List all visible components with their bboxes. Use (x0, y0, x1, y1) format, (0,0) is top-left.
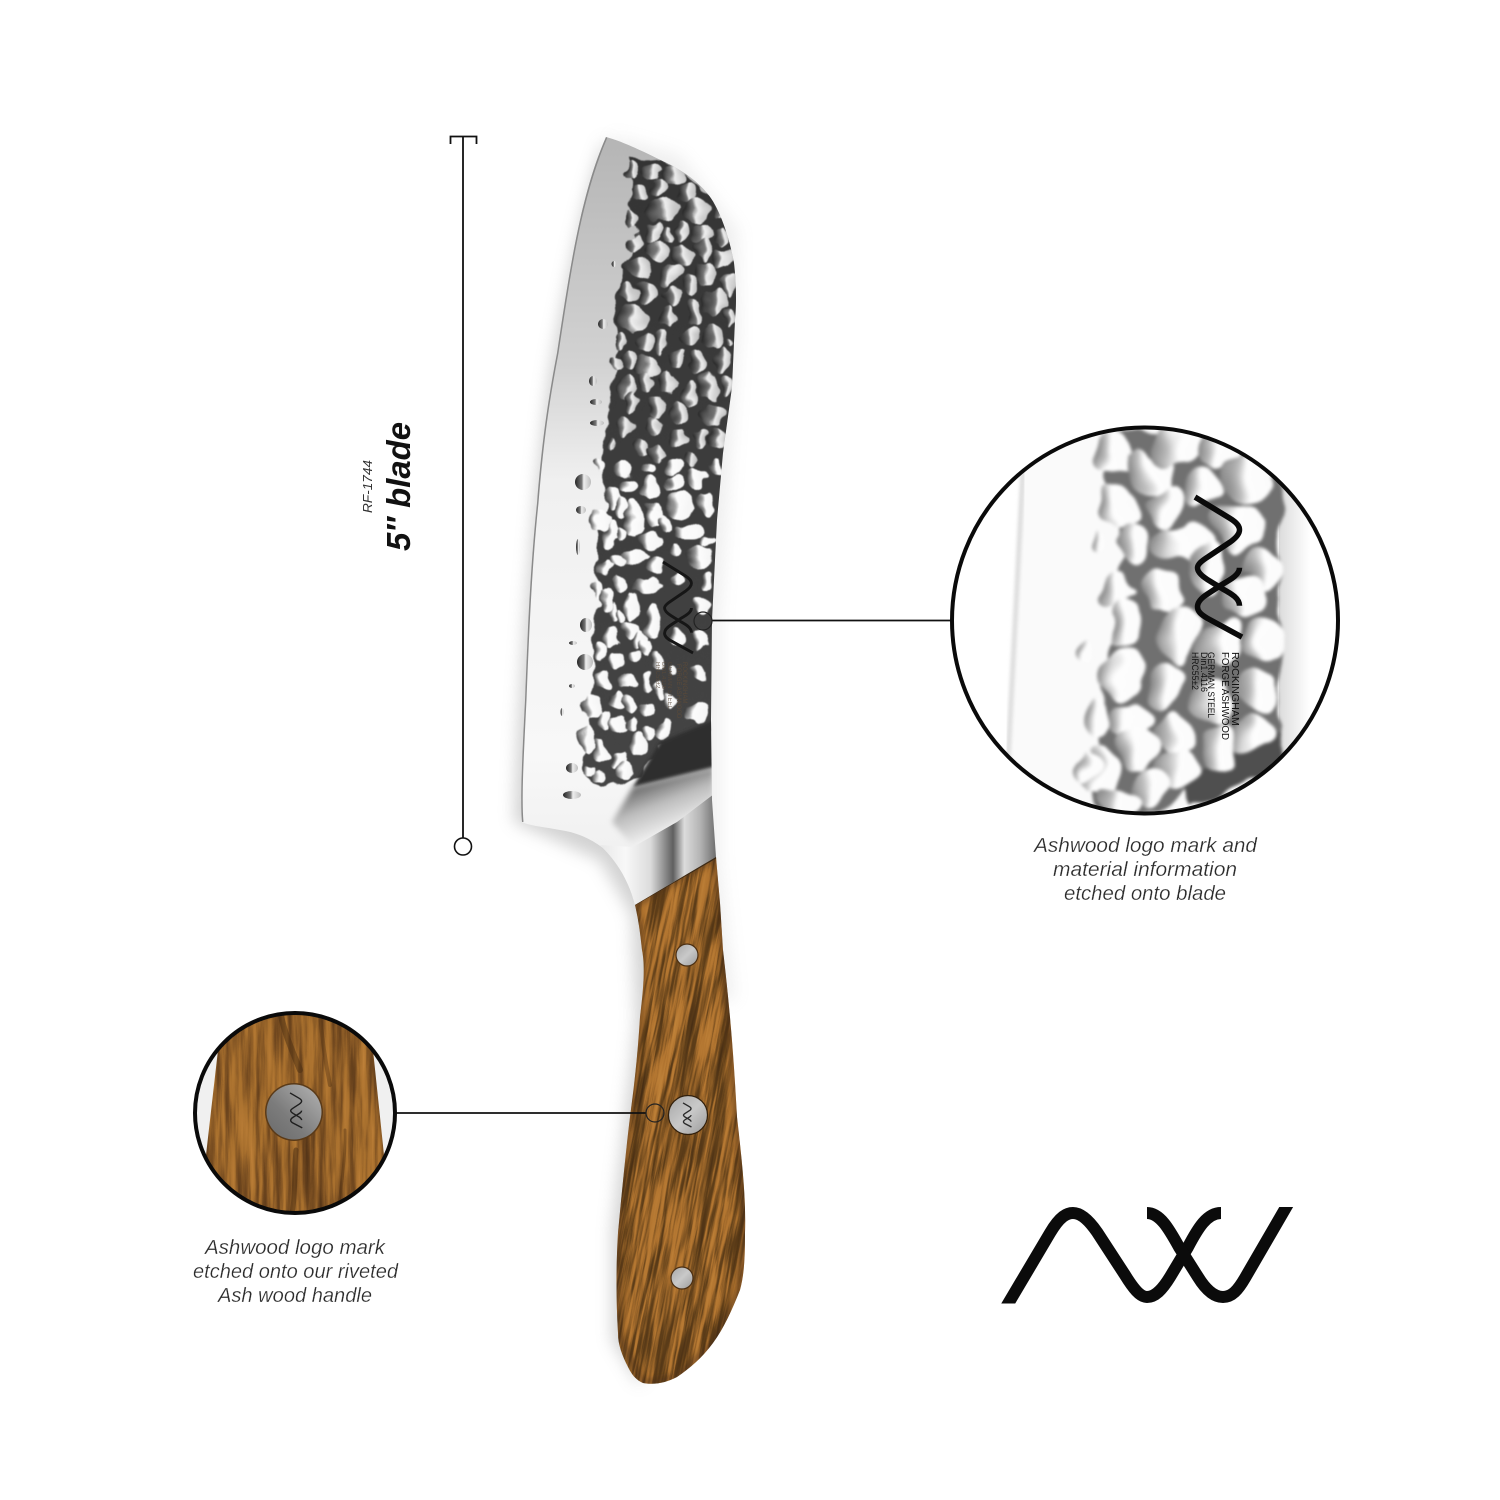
dimpled area base (1092, 430, 1280, 815)
brand logo (1001, 1207, 1294, 1304)
etched blade text: Din1.4116 (660, 662, 666, 690)
large etched text: GERMAN STEEL (1206, 652, 1216, 718)
handle (616, 857, 746, 1384)
rivet logo (668, 1096, 708, 1134)
heel band (612, 767, 714, 847)
rivet bottom (671, 1267, 693, 1289)
caption: handle rivet: Ash wood handle (217, 1285, 372, 1307)
caption: blade etching (1033, 835, 1258, 905)
large etched text: FORGE ASHWOOD (1219, 652, 1230, 740)
knife soft shadow (514, 137, 680, 1386)
rivet engraved logo (290, 1093, 302, 1128)
blade length label: 5″ blade (380, 422, 417, 551)
etched blade text: ROCKINGHAM (681, 662, 687, 703)
blade left bevel (1008, 470, 1023, 760)
heel darkness (1190, 730, 1280, 812)
rivet top (676, 944, 698, 966)
etched blade text: GERMAN STEEL (666, 662, 672, 710)
detail circle: etched blade (950, 425, 1340, 817)
blade edge bevel (521, 137, 606, 822)
caption: blade etching: etched onto blade (1064, 883, 1226, 905)
hammered dimples upper (608, 160, 736, 465)
callout leader: handle rivet (395, 1104, 664, 1122)
spine shading (1279, 487, 1302, 754)
caption: handle rivet: Ashwood logo mark (204, 1237, 386, 1259)
blade length dimension line (450, 136, 476, 855)
etched blade text (654, 662, 687, 719)
handle edge shading (618, 857, 745, 1383)
large etched text: ROCKINGHAM (1229, 652, 1240, 726)
caption: blade etching: material information (1053, 859, 1237, 881)
detail circle: handle rivet (190, 1005, 400, 1220)
large etched logo (1195, 497, 1242, 637)
hammered dimples lower (580, 459, 724, 783)
hammered dark base (582, 155, 742, 790)
blade (515, 130, 745, 910)
caption: handle rivet: etched onto our riveted (193, 1261, 399, 1283)
dark heel patch (633, 720, 714, 787)
caption: blade etching: Ashwood logo mark and (1033, 835, 1258, 857)
model number label: RF-1744 (360, 460, 375, 513)
etched blade logo (663, 562, 693, 653)
magnified rivet (265, 1083, 323, 1141)
knife (508, 137, 746, 1384)
magnified wood (206, 1015, 384, 1211)
hammered texture (580, 155, 742, 790)
callout leader: blade logo (694, 612, 951, 630)
large etched text: HRC55±2 (1190, 652, 1200, 690)
large etched text (1190, 652, 1240, 740)
isolated fringe dimples (560, 261, 616, 799)
steel to wood seam (634, 857, 717, 905)
etched blade text: FORGE ASHWOOD (675, 664, 681, 719)
grain streaks (280, 1012, 345, 1215)
blade surface (1008, 430, 1277, 815)
bolster (618, 796, 716, 900)
large etched text: Din1.4116 (1199, 652, 1209, 692)
etched blade text: HRC55±2 (654, 662, 660, 689)
caption: handle rivet (193, 1237, 399, 1307)
magnified hammered texture (1079, 425, 1282, 816)
dimples (1079, 425, 1282, 816)
